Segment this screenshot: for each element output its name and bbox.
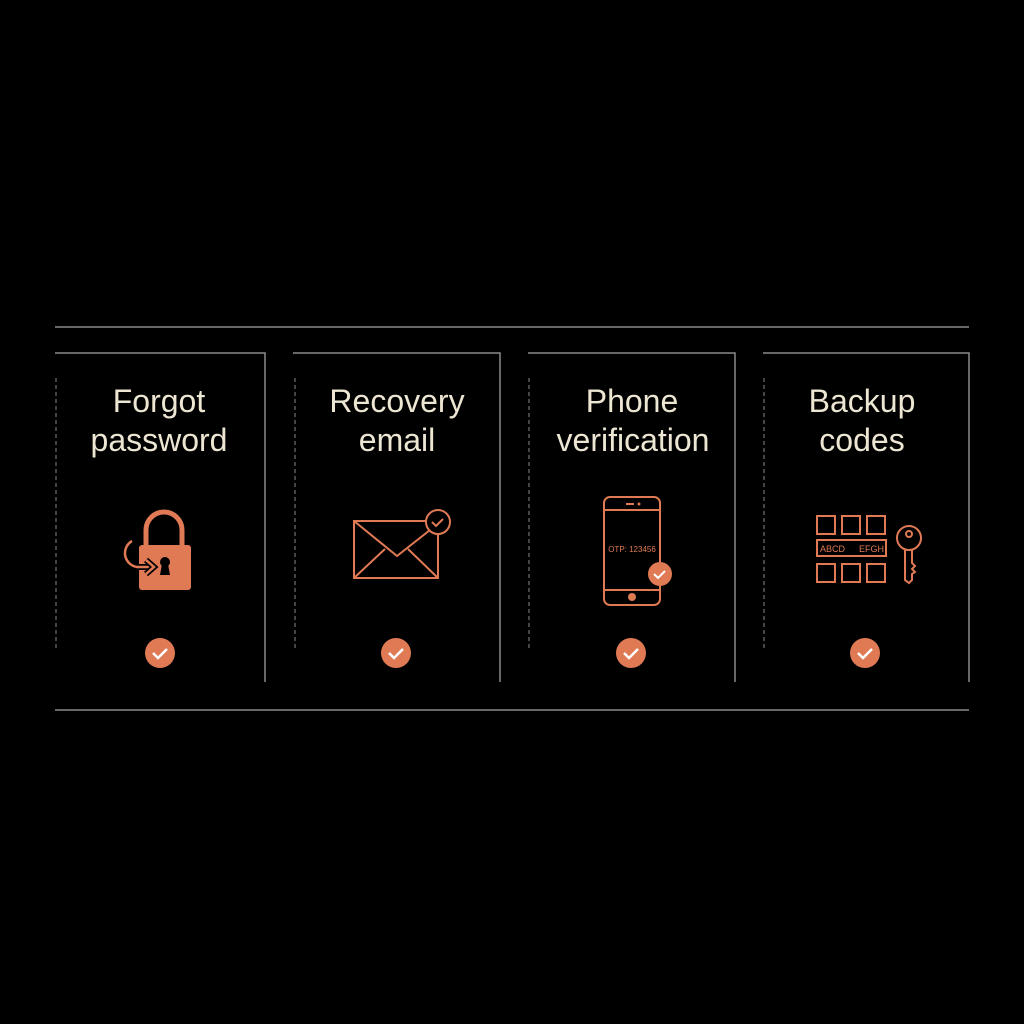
heading: phone verification: verification xyxy=(557,422,709,458)
check badge xyxy=(850,638,880,668)
icon: code grid and key: ABCD xyxy=(820,544,846,554)
check badge xyxy=(145,638,175,668)
icon: envelope with check xyxy=(354,510,450,578)
heading: backup codes: codes xyxy=(819,422,905,458)
panel: phone verification xyxy=(528,353,735,682)
heading: recovery email: email xyxy=(359,422,435,458)
panel: forgot password xyxy=(55,353,265,682)
check badge xyxy=(381,638,411,668)
icon: phone with OTP xyxy=(604,497,672,605)
icon: code grid and key: EFGH xyxy=(859,544,884,554)
heading: forgot password: Forgot xyxy=(113,383,205,419)
heading: phone verification: Phone xyxy=(586,383,678,419)
check badge xyxy=(616,638,646,668)
icon: code grid and key xyxy=(817,516,921,583)
icon: phone with OTP: OTP: 123456 xyxy=(608,545,656,554)
panel: backup codes xyxy=(763,353,969,682)
icon: unlocked padlock xyxy=(125,512,191,590)
panel: recovery email xyxy=(293,353,500,682)
heading: recovery email: Recovery xyxy=(329,383,465,419)
heading: backup codes: Backup xyxy=(809,383,915,419)
heading: forgot password: password xyxy=(91,422,227,458)
